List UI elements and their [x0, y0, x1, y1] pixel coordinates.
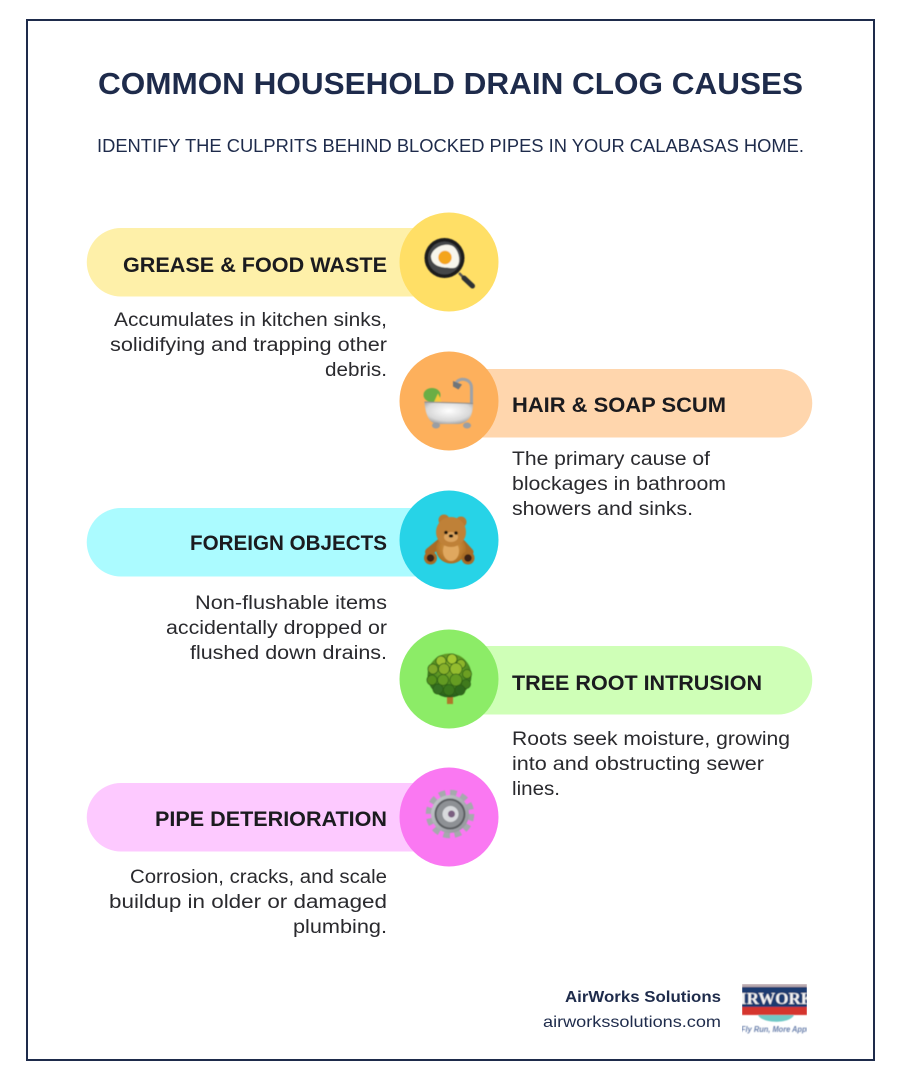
- pill: hair: [448, 369, 812, 438]
- text: foreign description: Non-flushable items: [195, 593, 387, 614]
- text: grease description: debris.: [325, 360, 387, 381]
- text: tree description: lines.: [512, 779, 560, 800]
- circle: pipe: [400, 768, 498, 866]
- circle: hair: [400, 352, 498, 450]
- text: grease description: solidifying and trapping other: [110, 335, 388, 356]
- label: tree: TREE ROOT INTRUSION: [512, 672, 762, 695]
- text: tree description: [512, 729, 790, 800]
- text: grease description: [110, 310, 388, 381]
- text: hair description: blockages in bathroom: [512, 474, 726, 495]
- icon: tree: [427, 654, 472, 704]
- text: hair description: [512, 449, 726, 520]
- logo: IRWORK: [740, 989, 815, 1008]
- pill: grease: [87, 228, 450, 296]
- text: hair description: The primary cause of: [512, 449, 711, 470]
- panel: tree root intrusion: [400, 630, 812, 800]
- logo: Fly Run, More Appt: [741, 1025, 809, 1034]
- text: foreign description: accidentally dropped or: [166, 618, 388, 639]
- text: grease description: Accumulates in kitchen sinks,: [114, 310, 387, 331]
- panel: hair and soap scum: [400, 352, 812, 520]
- text: pipe description: plumbing.: [293, 917, 387, 938]
- icon: frying pan with egg: [424, 238, 472, 286]
- text: pipe description: [109, 867, 387, 938]
- text: foreign description: [166, 593, 388, 664]
- icon: gear: [430, 794, 470, 834]
- text: tree description: into and obstructing sewer: [512, 754, 765, 775]
- text: tree description: Roots seek moisture, growing: [512, 729, 790, 750]
- footer: website: airworkssolutions.com: [543, 1014, 721, 1031]
- label: grease: GREASE & FOOD WASTE: [123, 254, 387, 277]
- title: COMMON HOUSEHOLD DRAIN CLOG CAUSES: [98, 66, 803, 101]
- panel: pipe deterioration: [87, 768, 498, 938]
- panel: foreign objects: [87, 490, 498, 664]
- label: pipe: PIPE DETERIORATION: [155, 808, 387, 831]
- pill: foreign: [87, 508, 450, 576]
- label: foreign: FOREIGN OBJECTS: [190, 532, 387, 555]
- circle: tree: [400, 630, 498, 728]
- text: foreign description: flushed down drains.: [190, 643, 387, 664]
- pill: pipe: [87, 783, 450, 852]
- text: pipe description: buildup in older or damaged: [109, 892, 387, 913]
- icon: teddy bear: [424, 514, 474, 564]
- circle: grease: [400, 212, 498, 312]
- label: hair: HAIR & SOAP SCUM: [512, 394, 726, 417]
- circle: foreign: [400, 490, 498, 590]
- text: hair description: showers and sinks.: [512, 499, 693, 520]
- text: pipe description: Corrosion, cracks, and scale: [130, 867, 387, 888]
- icon: bathtub: [424, 379, 473, 428]
- panel: grease and food waste: [87, 212, 498, 381]
- footer: brand name: AirWorks Solutions: [565, 989, 721, 1006]
- logo: [742, 984, 807, 1034]
- pill: tree: [448, 646, 812, 714]
- subtitle: IDENTIFY THE CULPRITS BEHIND BLOCKED PIPES IN YOUR CALABASAS HOME.: [97, 136, 804, 156]
